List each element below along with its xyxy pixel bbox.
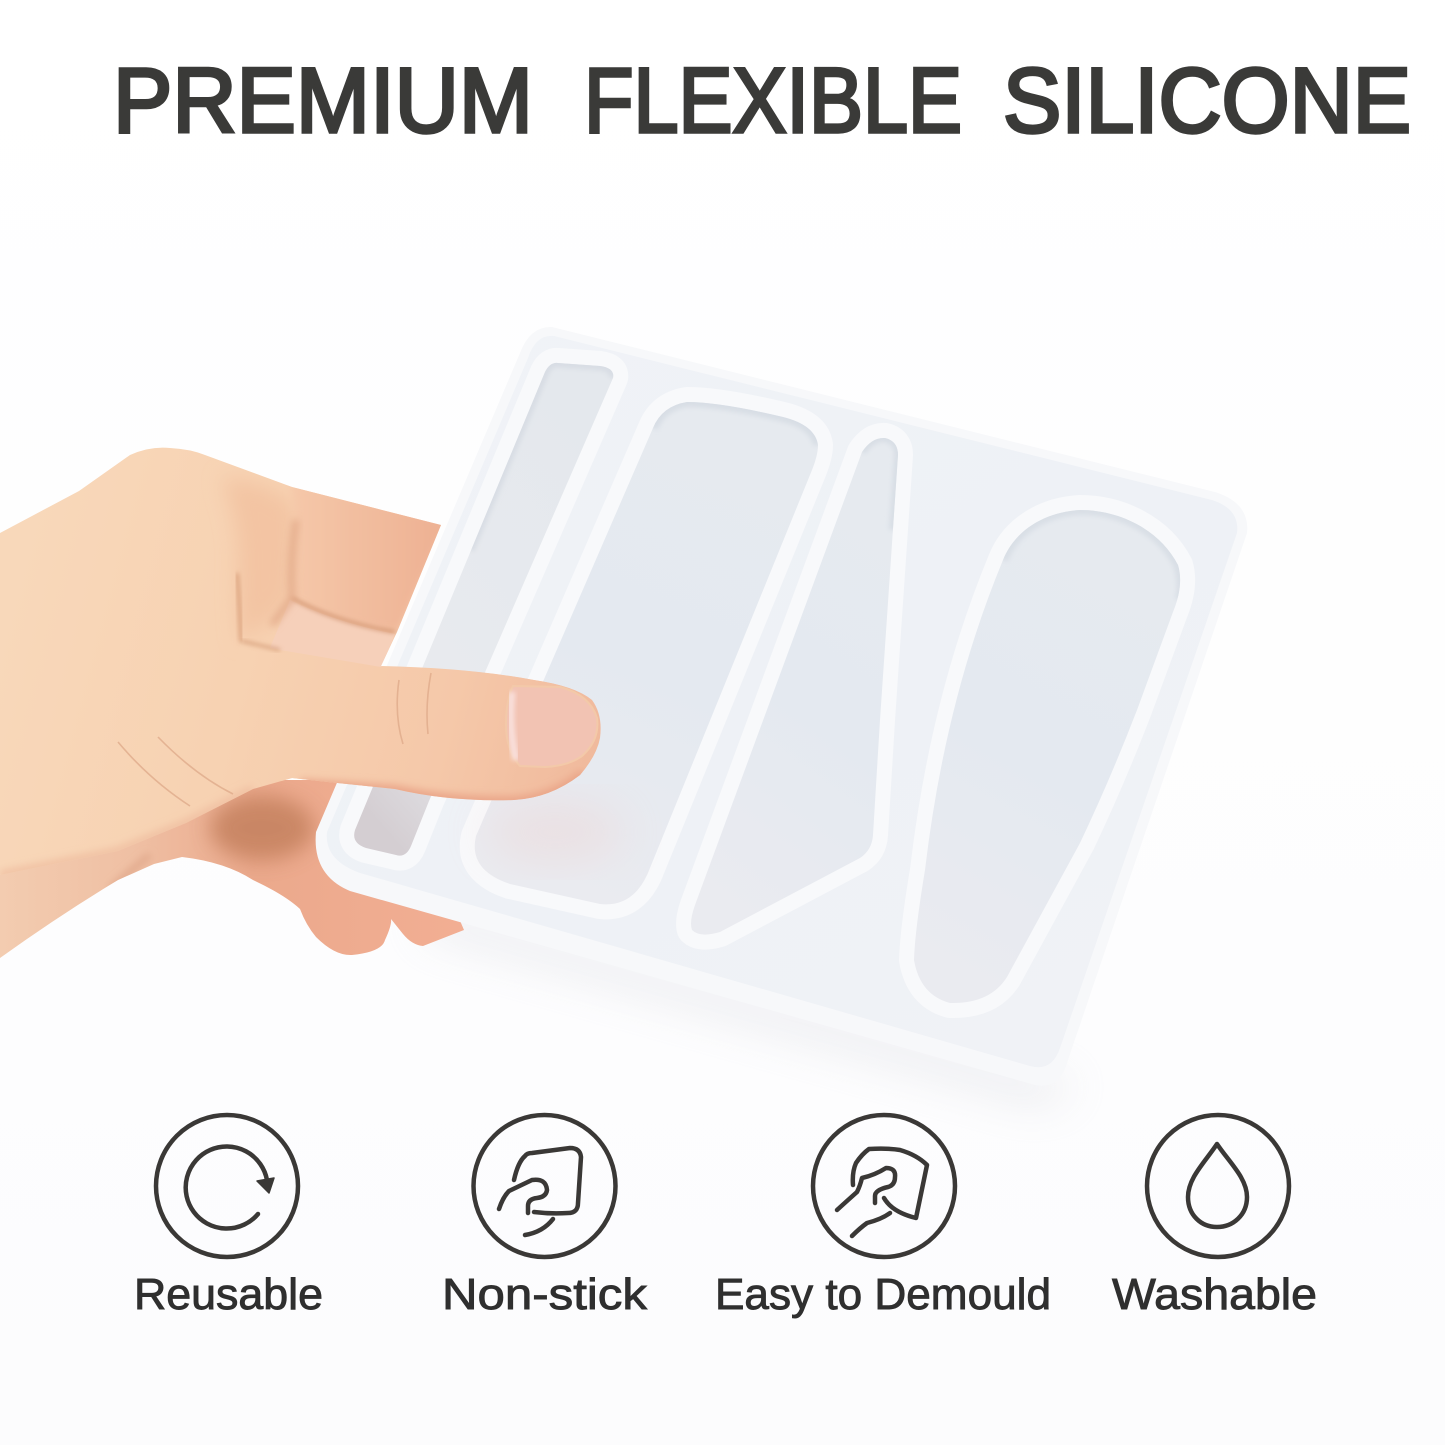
cavity 1: narrow slot (354, 363, 613, 856)
label: Easy to Demould: Easy to Demould (715, 1270, 1051, 1319)
icon: reuse arrow (156, 1115, 298, 1257)
palm edge shading (0, 789, 253, 875)
photo: hand holding silicone mould (0, 327, 1247, 1105)
icon: hand peeling sheet (474, 1115, 616, 1257)
cavity 2: rounded bar (475, 402, 818, 904)
knuckle shading (228, 481, 290, 630)
cavity 4: teardrop (914, 510, 1182, 1003)
hand: lower fingers behind the mould (0, 780, 464, 958)
cavity 3: angled wedge (691, 438, 898, 935)
feature: Easy to Demould (715, 1115, 1051, 1319)
icon: water drop (1147, 1115, 1289, 1257)
crease between index and middle fingers (292, 598, 395, 632)
index finger (291, 486, 441, 632)
silicone mould (316, 327, 1247, 1086)
mould top surface (327, 336, 1237, 1067)
title: FLEXIBLE (584, 50, 962, 152)
mould outer body and side edge (316, 327, 1247, 1086)
thumb underside shading (300, 775, 585, 803)
label: Washable: Washable (1112, 1270, 1317, 1319)
feature: Non-stick (442, 1115, 648, 1319)
title: SILICONE (1003, 50, 1411, 152)
thumb glow on mould (485, 802, 625, 862)
feature: Washable (1112, 1115, 1317, 1319)
middle finger (269, 600, 395, 668)
thumb (280, 650, 596, 798)
thumb nail (506, 686, 597, 767)
skin fold lines (118, 673, 431, 806)
title: PREMIUM (113, 50, 533, 152)
label: Non-stick: Non-stick (442, 1270, 648, 1319)
icon: hand bending mould (813, 1115, 955, 1257)
feature: Reusable (134, 1115, 323, 1319)
label: Reusable: Reusable (134, 1270, 323, 1319)
mould drop shadow (420, 905, 1080, 1105)
title (113, 50, 1411, 152)
hand: palm, fingers and thumb (0, 440, 610, 880)
